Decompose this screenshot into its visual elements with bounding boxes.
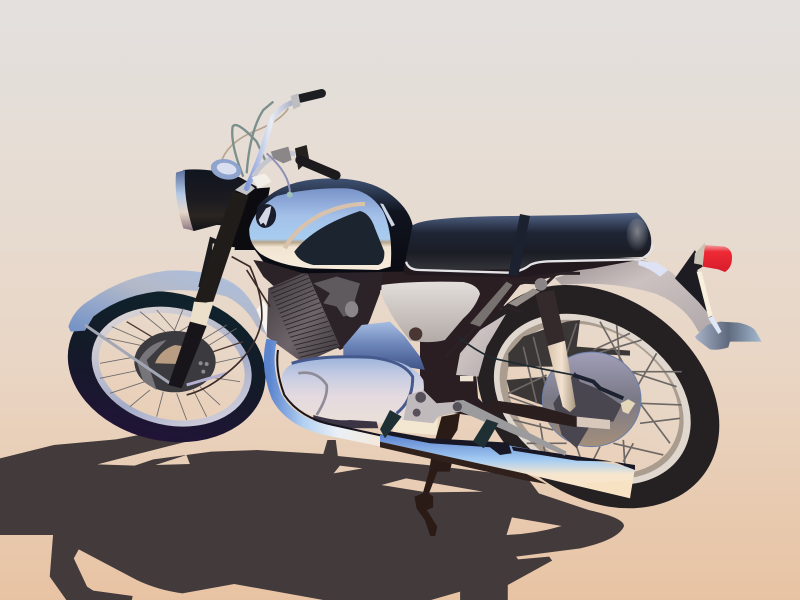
fork clamp — [212, 243, 235, 253]
rear rim inner band — [470, 287, 713, 511]
fork yoke — [223, 187, 270, 250]
cylinder fins — [267, 272, 340, 363]
speedometer face — [216, 161, 238, 176]
carburetor detail — [313, 277, 360, 317]
front hub tan panel — [155, 345, 187, 364]
front fender — [68, 270, 267, 335]
lower bar — [253, 152, 295, 177]
fork lower — [168, 322, 207, 388]
seat piping — [406, 245, 653, 273]
rear tire — [433, 239, 763, 554]
mount area and upper stand — [393, 413, 460, 447]
seat cushion — [397, 213, 651, 270]
rear wheel — [433, 239, 763, 554]
front hub highlight — [137, 340, 167, 390]
muffler under edge — [380, 442, 547, 484]
upper grip collar — [291, 93, 301, 109]
header dark edge — [277, 350, 383, 436]
crank cover ring — [292, 357, 413, 413]
seat strap — [508, 214, 530, 276]
brake rod — [573, 375, 623, 398]
fork upper — [194, 192, 249, 303]
inner fender hanger — [456, 314, 506, 377]
headlight and fork — [168, 169, 270, 388]
side stand upper — [433, 413, 460, 447]
rear hub — [542, 352, 641, 447]
honda wing — [259, 206, 271, 226]
knee pad — [294, 211, 384, 265]
lower grip — [300, 160, 336, 175]
tank shell — [250, 178, 413, 273]
brown cables — [187, 257, 270, 395]
rear rim — [462, 279, 722, 520]
front footpeg — [380, 410, 402, 438]
front hub rivets — [199, 361, 209, 374]
shock lower — [548, 341, 576, 412]
steering head — [235, 182, 255, 195]
upper grip — [301, 93, 322, 98]
frame brace — [470, 282, 513, 327]
shock body — [535, 290, 565, 346]
headlight shell — [183, 169, 257, 231]
exhaust header pipe — [269, 340, 383, 442]
side stand lower — [414, 458, 452, 536]
brake clevis — [621, 399, 635, 414]
seat rear highlight — [627, 218, 648, 252]
frame struts — [445, 273, 580, 357]
rear hub detail — [553, 372, 622, 448]
lower lever perch — [271, 147, 292, 163]
rear shock and swingarm — [445, 273, 580, 427]
tank highlight — [380, 203, 395, 227]
muffler upper trim — [387, 431, 635, 470]
rear fender — [555, 259, 721, 337]
carburetor knob — [345, 301, 358, 317]
side cover knob — [409, 327, 422, 341]
cream bracket below engine — [393, 413, 438, 435]
muffler rear end — [587, 480, 632, 498]
grey cables — [232, 102, 273, 177]
front rim — [80, 291, 264, 442]
handlebars and controls — [209, 93, 336, 198]
swingarm — [490, 400, 577, 427]
front wheel — [53, 270, 281, 461]
knee pad trim — [285, 204, 365, 248]
rear footpeg — [473, 419, 498, 448]
rear spokes — [508, 322, 682, 467]
handlebar tube — [247, 102, 295, 188]
tail light mount — [694, 243, 705, 265]
fork cream band — [190, 302, 213, 326]
crank cover ellipse — [298, 373, 327, 415]
mount bolts — [413, 392, 462, 417]
front hub — [134, 331, 216, 392]
brace plate — [508, 288, 540, 307]
honda badge — [253, 202, 279, 230]
headlight chrome rim — [176, 170, 193, 231]
side cover — [381, 282, 480, 342]
engine mount plate — [403, 390, 460, 423]
plate stem — [708, 316, 722, 334]
crank cover lower shadow — [313, 415, 378, 428]
front tire — [53, 272, 281, 461]
rear fender and tail — [456, 243, 762, 381]
license plate bracket — [675, 250, 712, 317]
shock top eye — [535, 278, 547, 291]
crankcase cover — [282, 357, 424, 423]
lower switch — [295, 145, 309, 170]
front brake bar — [187, 373, 227, 385]
white frame strip — [257, 300, 274, 335]
fender stay — [85, 325, 170, 383]
upper engine dark block — [253, 260, 383, 350]
brake arm — [577, 417, 610, 429]
fin lines — [270, 274, 339, 357]
kick lever — [455, 400, 567, 456]
fender highlight — [638, 261, 668, 277]
seat under trim — [397, 257, 647, 277]
hanger foot — [460, 376, 473, 381]
front spokes — [100, 308, 243, 420]
engine — [187, 257, 425, 428]
frame and dark body — [310, 255, 600, 420]
rear wheel opening — [480, 293, 707, 504]
crankcase dome — [343, 322, 425, 370]
tail light — [703, 245, 732, 272]
seat — [397, 213, 653, 277]
clutch cable — [267, 153, 290, 194]
muffler — [380, 435, 635, 498]
tank — [249, 178, 413, 273]
white mount — [252, 173, 272, 188]
front wheel opening — [88, 299, 256, 435]
drive chain blocks — [507, 320, 630, 407]
rear fork leg — [198, 237, 227, 293]
tank chrome panel — [249, 188, 391, 270]
rear reflector plate — [695, 322, 762, 350]
speedometer — [209, 156, 243, 182]
tan cable — [221, 108, 288, 163]
cable nipple — [287, 192, 293, 198]
ground shadow — [0, 430, 624, 600]
muffler and controls — [380, 390, 635, 498]
white bracket strip — [697, 272, 713, 317]
cable — [457, 337, 573, 375]
